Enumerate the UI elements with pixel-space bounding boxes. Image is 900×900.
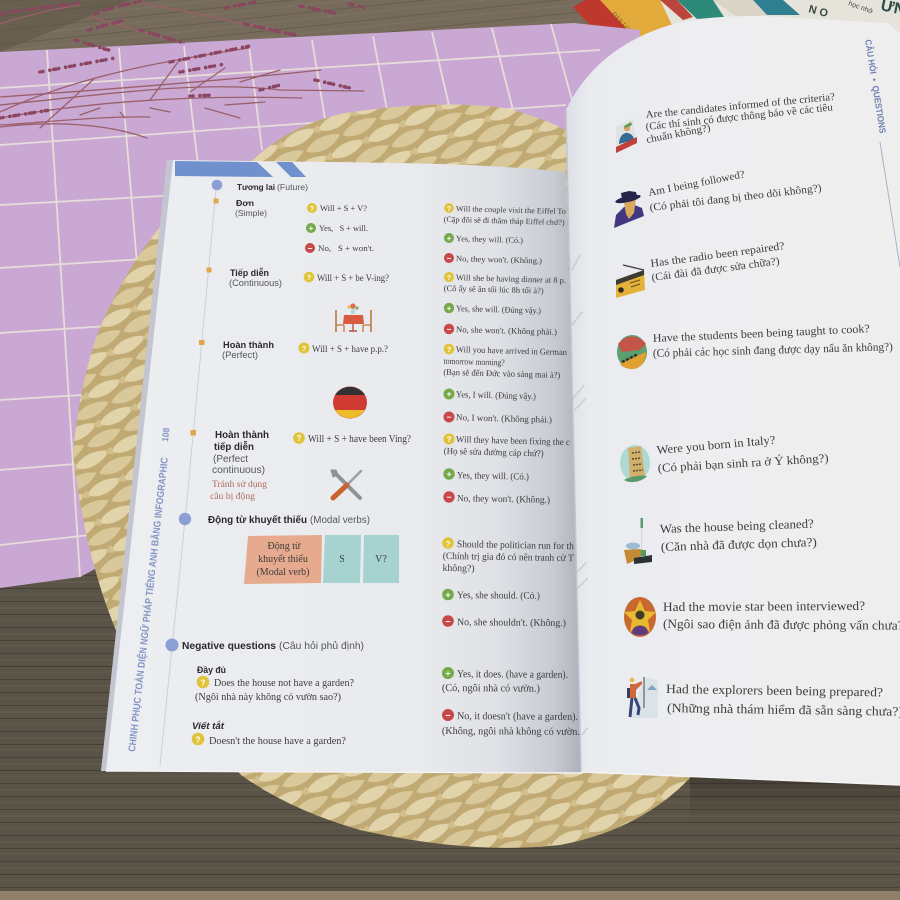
heading: future (212, 180, 308, 192)
simple future tense: ? (310, 206, 314, 213)
answer: yes they will: + (446, 469, 452, 479)
example: politician (442, 537, 574, 576)
icon: mop and bucket (624, 518, 652, 564)
simple future tense: + (309, 224, 314, 233)
left book page (101, 160, 582, 773)
answer: no she won't: No, she won't. (Không phải.) (456, 324, 557, 337)
modal verb formula boxes: khuyết thiếu (258, 554, 308, 565)
answer: yes they will: Yes, they will. (Có.) (457, 470, 529, 483)
example: Eiffel: ? (447, 206, 451, 213)
question 3 (616, 240, 785, 298)
question 8: Had the explorers been being prepared? (666, 682, 883, 699)
icon: movie star (624, 597, 656, 637)
answer: no it doesn't: (Không, ngôi nhà không có vườn. (442, 726, 580, 738)
perfect continuous future tense: (Perfect (213, 454, 248, 465)
answer: no it doesn't (442, 709, 580, 738)
answer: yes it does: Yes, it does. (have a garden). (457, 669, 568, 681)
example: Germany: tomorrow morning? (444, 356, 505, 367)
heading: modal verbs (179, 513, 370, 526)
example: Eiffel (444, 203, 566, 227)
simple future tense: Đơn (236, 198, 254, 208)
icon: man in hat (614, 191, 644, 228)
right book page (566, 16, 900, 785)
answer: no they won't: No, they won't. (Không.) (456, 254, 542, 265)
heading: modal verbs: Động từ khuyết thiếu (208, 514, 307, 526)
example: fixing cable: ? (446, 435, 452, 444)
continuous future tense (206, 268, 389, 288)
full negative question: (Ngôi nhà này không có vườn sao?) (195, 692, 341, 703)
question 5 (620, 433, 829, 482)
full negative question: ? (200, 678, 206, 688)
stack of books: LÀ BA (603, 28, 621, 47)
perfect future tense: ? (302, 344, 307, 353)
full negative question: Does the house not have a garden? (214, 678, 354, 689)
example: dinner (444, 272, 566, 296)
example: Eiffel: (Cặp đôi sẽ đi thăm tháp Eiffel chứ?) (444, 215, 565, 227)
modal verb formula boxes: V? (375, 554, 387, 565)
section label: CÂU HỎI • QUESTIONS (863, 39, 889, 134)
answer: yes I will: + (446, 389, 452, 399)
perfect continuous future tense: câu bị động (210, 492, 255, 502)
answer: no I won't: − (446, 412, 452, 422)
answer: yes she will: + (447, 304, 452, 313)
full negative question (195, 665, 354, 703)
perfect continuous future tense: Tránh sử dụng (212, 480, 267, 490)
answer: no they won't (443, 491, 550, 506)
heading: modal verbs: (Modal verbs) (310, 515, 370, 526)
question 4: (Có phải các học sinh đang được dạy nấu ăn không?) (653, 340, 893, 360)
perfect continuous future tense (190, 430, 412, 502)
icon: explorer (627, 677, 658, 718)
question 7: (Ngôi sao điện ảnh đã được phỏng vấn chưa?) (663, 617, 900, 633)
full negative question: Đầy đủ (197, 665, 226, 675)
question 3: (Cái đài đã được sửa chữa?) (651, 255, 781, 284)
continuous future tense: Tiếp diễn (230, 268, 269, 278)
examples column (442, 203, 580, 738)
perfect future tense: Hoàn thành (223, 340, 274, 350)
perfect continuous future tense: Hoàn thành (215, 430, 269, 441)
answer: yes it does (442, 667, 568, 695)
perfect continuous future tense: ? (297, 434, 302, 443)
modal verb formula boxes (244, 535, 399, 584)
modal verb formula boxes: (Modal verb) (256, 567, 310, 578)
example: dinner: ? (447, 275, 451, 282)
simple future tense: (Simple) (235, 208, 267, 218)
question 4: Have the students been being taught to cook? (653, 323, 870, 345)
answer: no they won't: No, they won't. (Không.) (457, 493, 550, 506)
question 2 (614, 168, 823, 228)
perfect continuous future tense: Will + S + have been Ving? (308, 434, 412, 445)
example: fixing cable: (Họ sẽ sửa đường cáp chứ?) (444, 446, 544, 459)
simple future tense: − (308, 244, 313, 253)
icon: cooking class (617, 335, 647, 369)
question 1: chuẩn không?) (645, 123, 712, 146)
question 8 (627, 677, 900, 719)
example: dinner: Will she be having dinner at 8 p. (456, 273, 566, 285)
perfect future tense (199, 340, 388, 360)
question 7 (624, 597, 900, 637)
short negative question (192, 720, 346, 747)
example: dinner: (Cô ấy sẽ ăn tối lúc 8h tối à?) (444, 284, 544, 295)
answer: no they won't: − (446, 492, 452, 502)
answer: no she shouldn't: − (445, 616, 451, 627)
stack of books: N O (807, 3, 830, 20)
question 5: Were you born in Italy? (656, 433, 776, 457)
stack of books (573, 0, 900, 52)
stack of books: ĐÀN LOK (611, 10, 635, 36)
question 2: (Có phải tôi đang bị theo dõi không?) (649, 182, 823, 214)
straw placemat (73, 105, 690, 848)
modal verb formula boxes: S (339, 554, 345, 565)
page number: 108 (160, 427, 171, 442)
blue header tabs (175, 161, 306, 177)
question 2: Am I being followed? (647, 168, 746, 199)
purple tiled mat (0, 23, 640, 588)
page sheet (106, 160, 582, 773)
page sheet (566, 16, 900, 785)
answer: no I won't: No, I won't. (Không phải.) (456, 412, 552, 425)
answer: yes she should: Yes, she should. (Có.) (457, 590, 540, 602)
question 4 (617, 323, 893, 369)
question 5: (Có phải bạn sinh ra ở Ý không?) (657, 451, 829, 475)
simple future tense: Will + S + V? (320, 203, 367, 213)
question 1: (Các thí sinh có được thông báo về các tiêu (645, 102, 834, 133)
answer: yes they will: Yes, they will. (Có.) (456, 234, 523, 245)
question 6 (624, 517, 817, 564)
spine title: CHINH PHỤC TOÀN DIỆN NGỮ PHÁP TIẾNG ANH BẰNG INFOGRAPHIC (125, 457, 171, 752)
heading: future: (Future) (277, 182, 308, 192)
short negative question: Doesn't the house have a garden? (209, 736, 346, 747)
perfect continuous future tense: continuous) (212, 465, 265, 476)
example: Eiffel: Will the couple visit the Eiffel To (456, 204, 566, 216)
example: fixing cable (443, 433, 570, 460)
example: Germany (443, 344, 568, 380)
answer: no it doesn't: − (445, 710, 451, 721)
question 1 (616, 92, 836, 153)
answer: yes it does: + (445, 668, 451, 679)
icon: German flag (333, 386, 367, 418)
icon: dinner table (336, 303, 371, 332)
simple future tense: Yes, S + will. (319, 223, 368, 233)
perfect future tense: Will + S + have p.p.? (312, 345, 388, 355)
perfect future tense: (Perfect) (222, 350, 258, 360)
short negative question: ? (195, 734, 201, 744)
question 6: Was the house being cleaned? (660, 517, 814, 536)
example: fixing cable: Will they have been fixing the c (456, 434, 570, 448)
answer: yes I will: Yes, I will. (Đúng vậy.) (456, 389, 536, 401)
page stack edge (101, 160, 175, 771)
continuous future tense: Will + S + be V-ing? (317, 273, 389, 283)
example: Germany: Will you have arrived in German (456, 344, 568, 357)
example: Germany: ? (447, 345, 452, 354)
modal verb formula boxes: Động từ (268, 541, 301, 552)
dried flower branches (0, 1, 365, 138)
simple future tense (214, 198, 374, 253)
continuous future tense: (Continuous) (229, 278, 282, 288)
example: politician: không?) (442, 563, 475, 574)
icon: leaning tower (620, 445, 650, 482)
question 3: Has the radio been repaired? (650, 240, 785, 270)
answer: yes they will: + (447, 234, 452, 243)
answer: no it doesn't: No, it doesn't (have a garden). (457, 711, 578, 723)
heading: future: Tương lai (237, 182, 275, 192)
example: politician: Should the politician run for th (457, 539, 574, 552)
icon: radio (616, 265, 645, 298)
example: Germany: (Bạn sẽ đến Đức vào sáng mai à?) (443, 367, 561, 380)
short negative question: Viết tắt (192, 720, 225, 732)
answer: no she won't: − (447, 325, 452, 334)
answer: yes it does: (Có, ngôi nhà có vườn.) (442, 683, 540, 695)
heading: negative questions: (Câu hỏi phủ định) (279, 640, 364, 652)
icon: crossed tools (331, 470, 361, 498)
icon: candidate (616, 118, 637, 153)
heading: negative questions (166, 638, 364, 652)
perfect continuous future tense: tiếp diễn (214, 440, 254, 453)
stack of books: học nhớ (847, 0, 874, 16)
question 1: Are the candidates informed of the criteria? (645, 92, 836, 121)
answer: yes they will (443, 468, 529, 483)
answer: yes she will: Yes, she will. (Đúng vậy.) (456, 303, 541, 315)
example: politician: (Chính trị gia đó có nên tranh cử T (443, 551, 574, 564)
question 7: Had the movie star been interviewed? (663, 599, 865, 614)
question 8: (Những nhà thám hiểm đã sẵn sàng chưa?) (667, 701, 900, 719)
answer: no she shouldn't: No, she shouldn't. (Không.) (457, 617, 566, 629)
continuous future tense: ? (307, 275, 311, 282)
question 6: (Căn nhà đã được dọn chưa?) (661, 535, 817, 554)
answer: no they won't: − (447, 254, 452, 263)
answer: yes she should: + (445, 590, 451, 600)
heading: negative questions: Negative questions (182, 640, 276, 652)
simple future tense: No, S + won't. (318, 243, 374, 253)
example: politician: ? (445, 539, 451, 549)
